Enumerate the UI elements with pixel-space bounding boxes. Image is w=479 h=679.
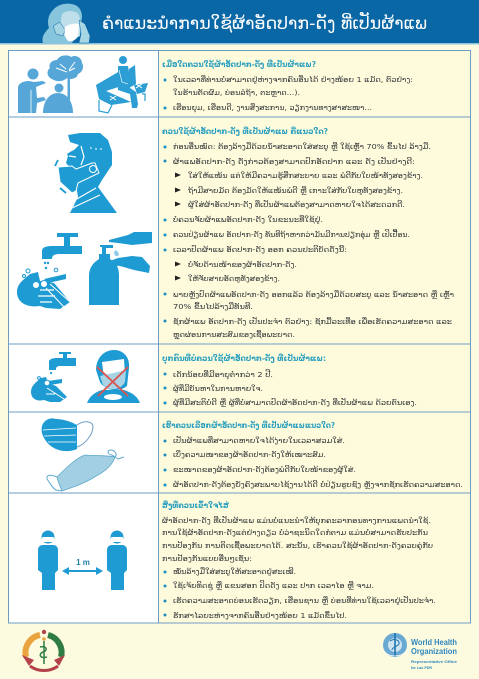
section: when to use: ໃນຮ້ານຕັດຜົມ, ບ່ອນລໍຖ້າ, ຕະຫຼາດ...).	[173, 88, 300, 97]
section: when to use: ໃນເວລາທີ່ທ່ານບໍ່ສາມາດຢູ່ຫ່າງຈາກຄົນອື່ນໄດ້ ຢ່າງໜ້ອຍ 1 ແມັດ, ຕົວຢ່າງ:	[173, 75, 413, 84]
section: how to use: ບໍ່ຄວນຈັບຜ້າແພອັດປາກ-ດັງ ໃນຂະນະທີ່ໃຊ້ຢູ່.	[173, 215, 323, 224]
section: how to use: ກ່ອນອື່ນໝົດ: ຕ້ອງລ້າງມືດ້ວຍນ້ຳສະອາດໃສ່ສະບູ ຫຼື ໃຊ້ເຫຼົ້າ 70% ຂຶ້ນໄປ ລ້າງມື.	[173, 142, 431, 151]
icon: woman putting on mask	[42, 4, 90, 43]
section: who should not use	[162, 354, 417, 407]
section: how to choose: ຂະໜາດຂອງຜ້າອັດປາກ-ດັງຕ້ອງພໍດີກັບໃບໜ້າຂອງຜູ້ໃສ່.	[173, 465, 356, 474]
section: things to understand: ໝັ່ນລ້າງມືໃສ່ສະບູໃຫ້ສະອາດຢູ່ສະເໝີ.	[173, 567, 296, 576]
section: when to use: ເຮືອນຍຸມ, ເຮືອນດີ, ງານສິ່ງສະການ, ວຽກງານທາງສາສະໜາ...	[173, 103, 372, 113]
faucet and hands	[31, 352, 76, 402]
logo: Lao Ministry of Health emblem	[22, 630, 65, 670]
section: who should not use: ຜູ້ທີ່ມີສະຕິບໍ່ດີ ຫຼື ຜູ້ທີ່ບໍ່ສາມາດປົດຜ້າອັດປາກ-ດັງ ທີ່ເປັນຜ້າແພ ດ້ວຍຕົນເອງ.	[173, 398, 417, 407]
section: things to understand: ໃຊ້ເຈ້ຍທິດຊູ່ ຫຼື ແຂນສອກ ປິດດັງ ແລະ ປາກ ເວລາໄອ ຫຼື ຈາມ.	[173, 580, 374, 591]
icon: hand washing under faucet	[17, 233, 82, 309]
section: how to use: ຄວນໃຊ້ຜ້າອັດປາກ-ດັງ ທີ່ເປັນຜ້າແພ ຄືແນວໃດ?	[162, 127, 328, 136]
section: how to use: ຊັກຜ້າແພ ອັດປາກ-ດັງ ເປັນປະຈຳ ຕົວຢ່າງ: ຊັກມື້ລະເທື່ອ ເພື່ອເຮັດຄວາມສະອາດ ແລະ	[173, 317, 453, 326]
icon: man wearing mask side profile	[55, 133, 117, 213]
section: when to use: ເມື່ອໃດຄວນໃຊ້ຜ້າອັດປາກ-ດັງ ທີ່ເປັນຜ້າແພ?	[162, 60, 316, 69]
section: how to choose: ເປັນຜ້າແພທີ່ສາມາດຫາຍໃຈໄດ້ງ່າຍໃນເວລາສວມໃສ່.	[173, 436, 345, 445]
section: who should not use: ຜູ້ທີ່ມີບັນຫາໃນການຫາຍໃຈ.	[173, 384, 263, 393]
section: how to choose: ຜ້າອັດປາກ-ດັງຕ້ອງຍັງຄົງສະພາບໄຊ້ງານໄດ້ດີ ບໍ່ປ່ຽນຮູບຊົງ ຫຼັງຈາກຊັກເຮັດຄວາມສະອາດ.	[173, 479, 463, 489]
section: who should not use: ເດັກນ້ອຍທີ່ມີອາຍຸຕ່ຳກວ່າ 2 ປີ.	[173, 369, 273, 380]
section: how to use: ຫຼຸດຜ່ອນການສະສົມຂອງເຊື້ອພະຍາດ.	[173, 330, 295, 340]
icon: cloth mask	[47, 450, 124, 491]
section: things to understand: ການປ້ອງກັນ ການຕິດເຊື້ອພະຍາດໄດ້. ສະນັ້ນ, ເຮົາຄວນໃຊ້ຜ້າອັດປາກ-ດັງຄວບຄູ່ກັບ	[162, 540, 433, 550]
section: how to choose: ເຮົາຄວນເລືອກຜ້າອັດປາກ-ດັງ ທີ່ເປັນຜ້າແພແນວໃດ?	[162, 421, 335, 430]
section: who should not use: ບຸກຄົນທີ່ບໍ່ຄວນໃຊ້ຜ້າອັດປາກ-ດັງ ທີ່ເປັນຜ້າແພ:	[162, 354, 326, 364]
distance label: 1 m	[76, 558, 90, 567]
icon: barber cutting hair under a tree	[18, 55, 83, 113]
header banner	[0, 0, 479, 44]
child with mask crossed out	[87, 350, 140, 403]
section: how to use: ພາຍຫຼັງປົດຜ້າແພອັດປາກ-ດັງ ອອກແລ້ວ ຕ້ອງລ້າງມືດ້ວຍສະບູ ແລະ ນ້ຳສະອາດ ຫຼື ເຫຼົ້າ	[173, 290, 454, 299]
logo: World Health Organization	[383, 633, 458, 670]
logo: World Health Organization: for Lao PDR	[411, 665, 432, 670]
section: how to choose	[162, 421, 463, 489]
icon: faucet, hand wash and crossed-out child mask	[31, 350, 140, 403]
section: things to understand: ການໃຊ້ຜ້າອັດປາກ-ດັງແຕ່ຢ່າງດຽວ ບໍ່ວ່າຊະນິດໃດກໍຕາມ ແມ່ນບໍ່ສາມາດຮັບປະກັນ	[162, 528, 428, 537]
section: how to use: ຄວນປ່ຽນຜ້າແພ ອັດປາກ-ດັງ ທັນທີຖ້າຫາກວ່າມັນມີການປຽກອຸ່ມ ຫຼື ເປິເປື້ອນ.	[173, 229, 410, 240]
WHO name: World Health	[411, 637, 457, 647]
section: how to use	[162, 127, 454, 340]
section: how to use: 70% ຂຶ້ນໄປລ້າງມືທັນທີ.	[173, 302, 253, 311]
person left	[38, 530, 58, 590]
WHO emblem	[383, 633, 407, 657]
section: how to use: ຜ້າແພອັດປາກ-ດັງ ດັ່ງກ່າວຕ້ອງສາມາດປົກອັດປາກ ແລະ ດັງ ເປັນຢ່າງດີ:	[173, 157, 415, 166]
title: ຄຳແນະນຳການໃຊ້ຜ້າອັດປາກ-ດັງ ທີ່ເປັນຜ້າແພ	[102, 10, 427, 34]
office note: Representative Office	[411, 659, 458, 664]
section: how to choose: ເບິ່ງຄວາມໜາຂອງຜ້າອັດປາກ-ດັງໃຫ້ເໝາະສົມ.	[173, 450, 326, 459]
section: things to understand: ເຮັດຄວາມສະອາດບ່ອນເຮັດວຽກ, ເຮືອນຊານ ຫຼື ບ່ອນທີ່ທ່ານໃຊ້ເວລາຢູ່ເປັນປະຈຳ.	[173, 596, 436, 605]
section: how to use: ໃຫ້ຈັບສາຍອັດຫູທັງສອງຂ້າງ.	[188, 274, 280, 283]
section: things to understand: ຜ້າອັດປາກ-ດັງ ທີ່ເປັນຜ້າແພ ແມ່ນບໍ່ແນະນຳໃຫ້ບຸກຄະລາກອນທາງການແພດນຳໃຊ້.	[162, 516, 431, 526]
icon: soap bottle with hands	[89, 232, 152, 305]
icon: surgical mask	[42, 418, 93, 451]
section: how to use: ຜູ້ໃສ່ຜ້າອັດປາກ-ດັງ ທີ່ເປັນຜ້າແພຕ້ອງສາມາດຫາຍໃຈໄດ້ສະດວກດີ.	[188, 200, 405, 209]
section: things to understand	[162, 501, 436, 620]
section: when to use	[162, 60, 413, 113]
arrow	[62, 567, 103, 575]
person right	[107, 530, 127, 590]
section: things to understand: ສິ່ງທີ່ຄວນເຂົ້າໃຈໄສ່	[162, 501, 230, 510]
icon: two people one metre apart	[38, 530, 127, 590]
icon: person on bench with distance marks	[96, 56, 148, 113]
logo: World Health Organization: Organization	[411, 646, 457, 656]
section: how to use: ຖ້າມີສາຍມັດ ຕ້ອງມັດໃຫ້ແໜ້ນພໍດີ ຫຼື ເກາະໃສ່ກັບໃບຫູທັງສອງຂ້າງ.	[188, 186, 403, 195]
section: things to understand: ຮັກສາໄລຍະຫ່າງຈາກຄົນອື່ນຢ່າງໜ້ອຍ 1 ແມັດຂຶ້ນໄປ.	[173, 611, 347, 620]
section: how to use: ໃສ່ໃຫ້ແໜ້ນ ແຕ່ໃຫ້ມີຄວາມຮູ້ສຶກສະບາຍ ແລະ ພໍດີກັບໃບໜ້າທັງສອງຂ້າງ.	[188, 171, 423, 180]
section: how to use: ເວລາປົດຜ້າແພ ອັດປາກ-ດັງ ອອກ ຄວນປະຕິບັດດັ່ງນີ້:	[173, 245, 347, 254]
section: how to use: ບໍ່ຈັບດ້ານໜ້າຂອງຜ້າອັດປາກ-ດັງ.	[188, 260, 297, 269]
section: things to understand: ການປ້ອງກັນແບບອື່ນໆເຊັ່ນ:	[162, 553, 252, 563]
